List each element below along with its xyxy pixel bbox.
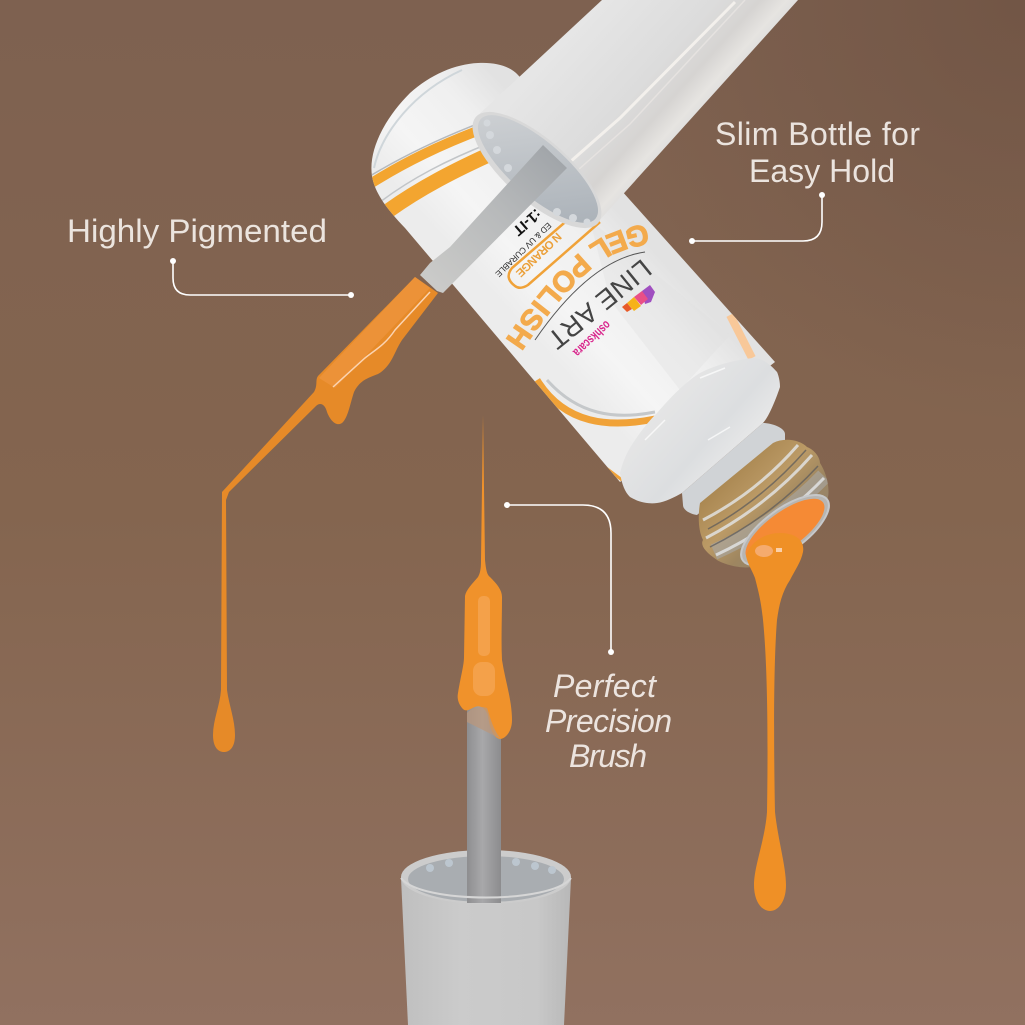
label text: line art: LINE ART: [542, 253, 657, 355]
brand name: oshkscara: [570, 318, 614, 361]
callout: slim bottle: [689, 116, 920, 244]
callout: slim bottle: Slim Bottle for: [715, 116, 920, 152]
brand logo: [570, 285, 655, 361]
callout: highly pigmented: [67, 213, 354, 298]
shade name pill: N ORANGE: [513, 230, 563, 279]
callout: slim bottle: Easy Hold: [749, 153, 895, 189]
polish blob: [458, 415, 512, 739]
cap: [456, 0, 798, 247]
callout: perfect precision brush: Precision: [545, 703, 672, 739]
translucent polish edge: [467, 707, 501, 739]
glass rim: [731, 482, 839, 578]
callout: highly pigmented: Highly Pigmented: [67, 213, 327, 249]
cap opening: [456, 93, 618, 247]
brush stick: [420, 145, 567, 293]
leader line: [689, 192, 825, 244]
callout: perfect precision brush: Brush: [569, 738, 647, 774]
stick: [467, 706, 501, 904]
pouring polish stream: [746, 533, 803, 911]
shade name pill: [509, 205, 600, 288]
leader line: [170, 258, 354, 298]
stream highlight: [755, 545, 782, 557]
brush highlights: [473, 596, 495, 696]
label text: gel polish: GEL POLISH: [506, 225, 648, 350]
polish on brush with drip: [213, 277, 438, 752]
bottle neck with glass threads: [682, 423, 830, 568]
bottle shoulder: [620, 358, 780, 503]
callout: perfect precision brush: [504, 502, 672, 774]
polish in mouth: [736, 488, 834, 572]
small print: ED & UV CURABLE: [493, 221, 554, 279]
shoulder highlights: [645, 368, 730, 440]
label arc line: [535, 252, 645, 340]
callout: perfect precision brush: Perfect: [553, 668, 657, 704]
bottle decorative stripes: [370, 70, 752, 480]
bottle body: [371, 62, 780, 504]
cup (lower cap): [401, 850, 571, 1025]
leader line: [504, 502, 614, 655]
upright brush with polish: [458, 415, 512, 904]
small bold mark: :1-IT: [509, 205, 545, 239]
cap inner dimples: [484, 120, 590, 226]
